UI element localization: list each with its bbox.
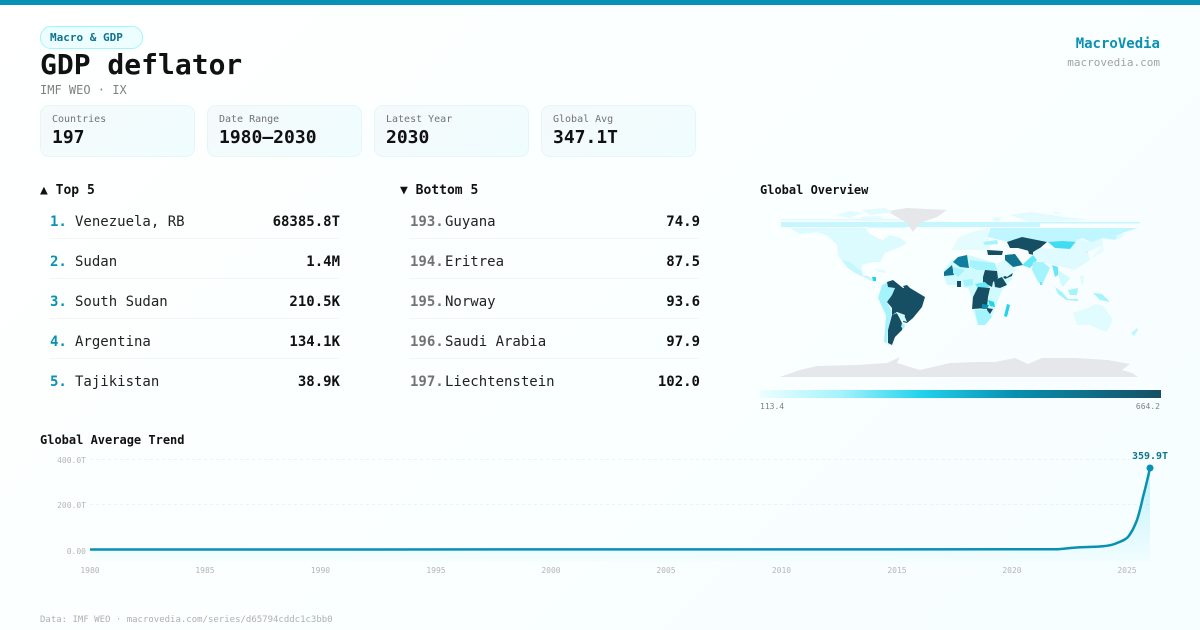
stat card: global average	[541, 105, 696, 157]
tanzania	[988, 300, 995, 307]
heading: global overview: Global Overview	[760, 183, 868, 197]
greenland	[887, 208, 947, 232]
x axis labels: 1985	[195, 566, 215, 575]
hudson bay	[866, 228, 884, 238]
row 196: Saudi Arabia	[445, 334, 546, 350]
x axis labels: 1995	[426, 566, 446, 575]
turkey	[987, 250, 1003, 255]
heading: top 5: ▲ Top 5	[40, 183, 95, 198]
row 4: 134.1K	[289, 334, 340, 350]
new zealand	[1131, 328, 1138, 336]
bolivia	[896, 312, 907, 322]
cuba	[875, 269, 887, 273]
guianas	[903, 285, 910, 291]
y axis labels: 400.0T	[57, 456, 86, 465]
row 195: 195.	[410, 294, 444, 310]
row 4: 4.	[50, 334, 67, 350]
south america base	[878, 282, 895, 347]
australia	[1073, 304, 1113, 332]
russia	[988, 228, 1138, 243]
row 5: 38.9K	[298, 374, 340, 390]
brand name: MacroVedia	[1076, 36, 1160, 52]
north america	[788, 227, 907, 273]
row 196	[410, 318, 700, 359]
row 2: 2.	[50, 254, 67, 270]
iran	[1005, 254, 1023, 267]
row 5: Tajikistan	[75, 374, 159, 390]
peak marker	[1146, 464, 1154, 472]
brand url: macrovedia.com	[1067, 56, 1160, 69]
row 196: 196.	[410, 334, 444, 350]
china	[1033, 238, 1103, 270]
mali	[953, 267, 965, 277]
central africa band	[975, 282, 990, 288]
footer source: Data: IMF WEO · macrovedia.com/series/d65794cddc1c3bb0	[40, 615, 333, 625]
brazil and neighbours	[887, 280, 925, 323]
zambia	[982, 304, 989, 309]
arctic band	[781, 219, 1140, 227]
row 197: 102.0	[658, 374, 700, 390]
x axis labels: 2025	[1117, 566, 1137, 575]
row 195	[410, 278, 700, 319]
algeria	[953, 255, 969, 268]
southern africa	[975, 310, 992, 325]
row 193: 193.	[410, 214, 444, 230]
mongolia	[1048, 241, 1077, 249]
myanmar	[1052, 265, 1058, 277]
world map	[780, 208, 1140, 377]
y axis labels: 0.00	[67, 547, 86, 556]
saudi arabia	[997, 260, 1017, 277]
mauritania	[944, 265, 954, 276]
category tag	[40, 26, 143, 49]
panel: bottom 5 list	[410, 214, 700, 390]
legend minimum: 113.4	[760, 402, 784, 411]
row 4: Argentina	[75, 334, 151, 350]
map legend colour bar	[760, 390, 1161, 398]
row 4	[50, 318, 340, 359]
subtitle: IMF WEO · IX	[40, 83, 127, 97]
stat card: countries: Countries	[52, 114, 106, 125]
row 3	[50, 278, 340, 319]
mexico	[843, 260, 863, 277]
row 193	[410, 198, 700, 239]
stat card: global average: Global Avg	[553, 114, 613, 125]
uruguay	[901, 323, 905, 329]
zimbabwe	[987, 308, 993, 314]
stat card: latest year: 2030	[386, 127, 429, 148]
central asia	[1028, 250, 1035, 255]
egypt	[985, 262, 997, 270]
row 3: South Sudan	[75, 294, 168, 310]
x axis labels: 1980	[80, 566, 100, 575]
x axis labels: 2020	[1002, 566, 1022, 575]
trend line	[90, 468, 1150, 550]
stat card: date range	[207, 105, 362, 157]
row 5: 5.	[50, 374, 67, 390]
yemen	[1003, 272, 1013, 279]
row 3: 210.5K	[289, 294, 340, 310]
stat card: countries	[40, 105, 195, 157]
costa rica patch	[872, 277, 876, 281]
row 3: 3.	[50, 294, 67, 310]
row 1: 1.	[50, 214, 67, 230]
y axis labels: 200.0T	[57, 501, 86, 510]
row 194: Eritrea	[445, 254, 504, 270]
top accent bar	[0, 0, 1200, 5]
category tag: Macro & GDP	[50, 31, 123, 44]
row 1	[50, 198, 340, 239]
sudan	[983, 270, 998, 287]
x axis labels: 1990	[311, 566, 330, 575]
heading: global average trend: Global Average Trend	[40, 433, 184, 447]
row 197	[410, 374, 700, 390]
japan	[1092, 245, 1104, 258]
india	[1032, 262, 1050, 285]
panel: top 5 list	[50, 214, 340, 390]
congo	[972, 287, 990, 309]
row 195: Norway	[445, 294, 496, 310]
row 194: 87.5	[666, 254, 700, 270]
central america	[860, 275, 880, 283]
x axis labels: 2010	[772, 566, 791, 575]
new guinea	[1093, 293, 1110, 302]
antarctica	[780, 357, 1138, 377]
row 2	[50, 238, 340, 279]
row 1: 68385.8T	[273, 214, 340, 230]
sakhalin	[1116, 233, 1126, 240]
row 197: 197.	[410, 374, 444, 390]
row 194	[410, 238, 700, 279]
pakistan	[1022, 255, 1037, 268]
x axis labels	[80, 566, 1137, 575]
row 195: 93.6	[666, 294, 700, 310]
x axis labels: 2015	[887, 566, 907, 575]
arctic islands	[835, 208, 1090, 222]
x axis labels: 2000	[541, 566, 561, 575]
heading: bottom 5: ▼ Bottom 5	[400, 183, 478, 198]
ukraine	[983, 240, 998, 245]
west africa spot	[957, 281, 961, 287]
row 2: 1.4M	[306, 254, 340, 270]
stat card: date range: 1980–2030	[219, 127, 317, 148]
sumatra and java	[1055, 287, 1078, 301]
row 1: Venezuela, RB	[75, 214, 185, 230]
ethiopia	[994, 277, 1007, 288]
kamchatka edge	[1116, 234, 1125, 240]
stat card: global average: 347.1T	[553, 127, 618, 148]
sri lanka	[1040, 282, 1042, 285]
legend maximum: 664.2	[1136, 402, 1160, 411]
row 2: Sudan	[75, 254, 117, 270]
row 194: 194.	[410, 254, 444, 270]
row 193: Guyana	[445, 214, 496, 230]
stat card: date range: Date Range	[219, 114, 279, 125]
stat card: latest year	[374, 105, 529, 157]
title: GDP deflator	[40, 48, 242, 81]
row 5	[50, 374, 340, 390]
africa base	[944, 255, 1013, 325]
area fill	[90, 468, 1150, 562]
line chart: global average trend	[57, 451, 1168, 575]
row 196: 97.9	[666, 334, 700, 350]
y axis labels	[57, 456, 86, 556]
borneo	[1068, 288, 1078, 295]
x axis labels: 2005	[656, 566, 676, 575]
madagascar	[1004, 304, 1010, 317]
philippines	[1080, 275, 1084, 285]
row 193: 74.9	[666, 214, 700, 230]
peak label: 359.9T	[1132, 451, 1168, 462]
stat card: countries: 197	[52, 127, 85, 148]
korea	[1085, 251, 1088, 254]
libya	[970, 260, 985, 270]
stat card: latest year: Latest Year	[386, 114, 452, 125]
kazakhstan	[1007, 237, 1047, 252]
europe	[952, 228, 990, 250]
indochina	[1058, 270, 1070, 287]
row 197: Liechtenstein	[445, 374, 555, 390]
argentina and chile	[888, 313, 903, 345]
nigeria	[963, 279, 973, 287]
